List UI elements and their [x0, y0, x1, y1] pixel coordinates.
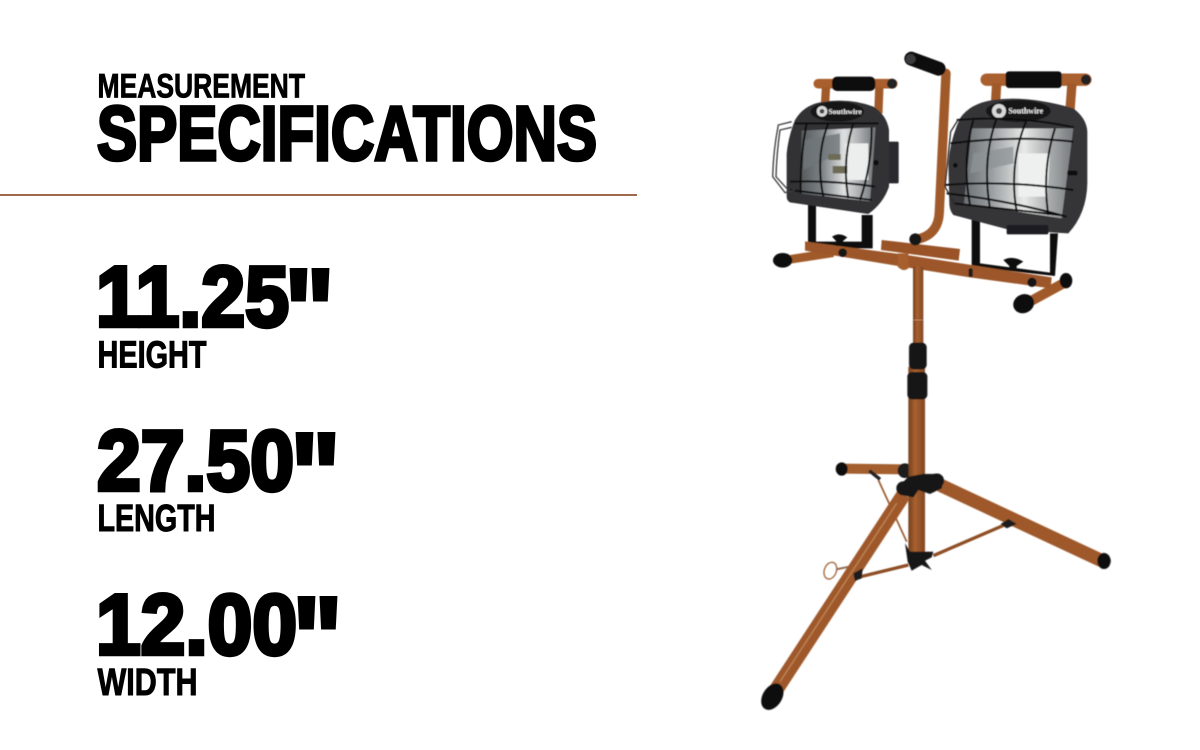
center pole and collars	[907, 320, 927, 553]
heading: measurement specifications: SPECIFICATIONS	[97, 91, 597, 177]
spec: length: 27.50	[97, 414, 294, 509]
lower hub	[905, 543, 933, 571]
spec: height	[96, 246, 334, 378]
spec: height: 11.25	[96, 250, 289, 345]
left lamp: Southwire	[828, 107, 862, 116]
spec: length: "	[290, 410, 340, 542]
spec: length: LENGTH	[98, 498, 216, 540]
braces and pull ring	[822, 471, 1007, 581]
right lamp	[945, 71, 1091, 276]
spec: width	[96, 574, 342, 706]
front right leg	[940, 485, 1111, 569]
divider rule	[0, 194, 637, 196]
light head assembly	[773, 54, 1091, 320]
cross bar with feet and knobs	[773, 233, 1072, 317]
spec: width: WIDTH	[98, 662, 198, 704]
spec: width: 12.00	[96, 578, 297, 673]
product illustration: twin work light on tripod	[757, 54, 1111, 714]
rear left leg	[836, 462, 912, 478]
left lamp	[773, 77, 899, 248]
heading: measurement specifications: MEASUREMENT	[98, 68, 305, 106]
spec: height: "	[284, 246, 334, 378]
upper pole section	[913, 267, 923, 320]
spec: height: HEIGHT	[98, 334, 206, 376]
upper hub	[896, 473, 944, 497]
tripod stand	[757, 320, 1111, 714]
right lamp: Southwire	[1008, 107, 1044, 116]
front left leg	[757, 494, 904, 714]
spec: width: "	[292, 574, 342, 706]
heading: measurement specifications	[97, 68, 597, 177]
spec: length	[97, 410, 340, 542]
center carry handle	[906, 54, 946, 239]
